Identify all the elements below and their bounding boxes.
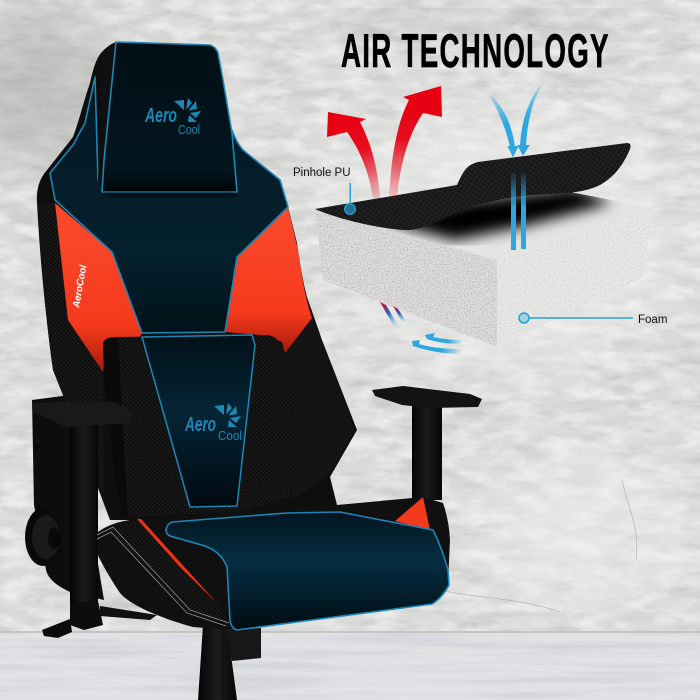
callout: Foam: Foam	[638, 314, 667, 326]
gaming chair	[25, 42, 482, 700]
foam block	[315, 187, 653, 347]
headrest logo	[144, 98, 201, 137]
floor	[0, 631, 700, 700]
callout: Pinhole PU	[293, 167, 355, 214]
base bar and foot	[42, 606, 157, 638]
small exhaust arrows	[380, 302, 463, 353]
right armrest post	[412, 405, 442, 500]
red panel right	[225, 208, 312, 353]
backrest outer black shell	[37, 42, 357, 520]
blue air arrow left	[490, 95, 517, 155]
lumbar centre panel	[142, 335, 255, 507]
seat red accent right	[395, 497, 430, 530]
headrest	[98, 42, 237, 197]
seat side mesh	[110, 520, 228, 622]
blue air channels through foam	[511, 173, 526, 250]
left armrest pad	[32, 402, 133, 427]
right armrest pad	[372, 386, 482, 408]
blue air arrow right	[519, 83, 543, 154]
headrest logo: Cool	[178, 123, 200, 137]
headrest logo: Aero	[144, 105, 177, 127]
callout: Pinhole PU: Pinhole PU	[293, 167, 351, 179]
pinhole PU sheet	[315, 143, 631, 230]
red air arrow right	[389, 86, 442, 198]
side frame and recline mechanism	[25, 395, 104, 600]
seat red accent left	[137, 519, 216, 602]
lumbar logo: Aero	[184, 414, 216, 436]
seat shell	[97, 497, 450, 630]
recline knob	[25, 508, 61, 566]
title: AIR TECHNOLOGY	[341, 26, 610, 78]
diagram: foam and pinhole PU layers	[315, 83, 653, 353]
seat stitching	[97, 527, 229, 626]
left armrest post	[70, 425, 103, 630]
gas lift	[198, 625, 261, 700]
callout: Foam	[519, 313, 667, 326]
lumbar logo: Cool	[218, 429, 242, 443]
red air arrow left	[327, 112, 380, 198]
lumbar pillow	[103, 335, 295, 517]
red panel left	[55, 203, 142, 372]
side brand text: AeroCool	[71, 264, 89, 309]
back side mesh left	[38, 203, 104, 500]
lumbar logo	[184, 403, 242, 443]
headrest shadow	[104, 192, 236, 197]
seat cushion	[166, 512, 449, 630]
backrest centre panel	[50, 77, 288, 333]
back side panel right	[285, 318, 355, 500]
